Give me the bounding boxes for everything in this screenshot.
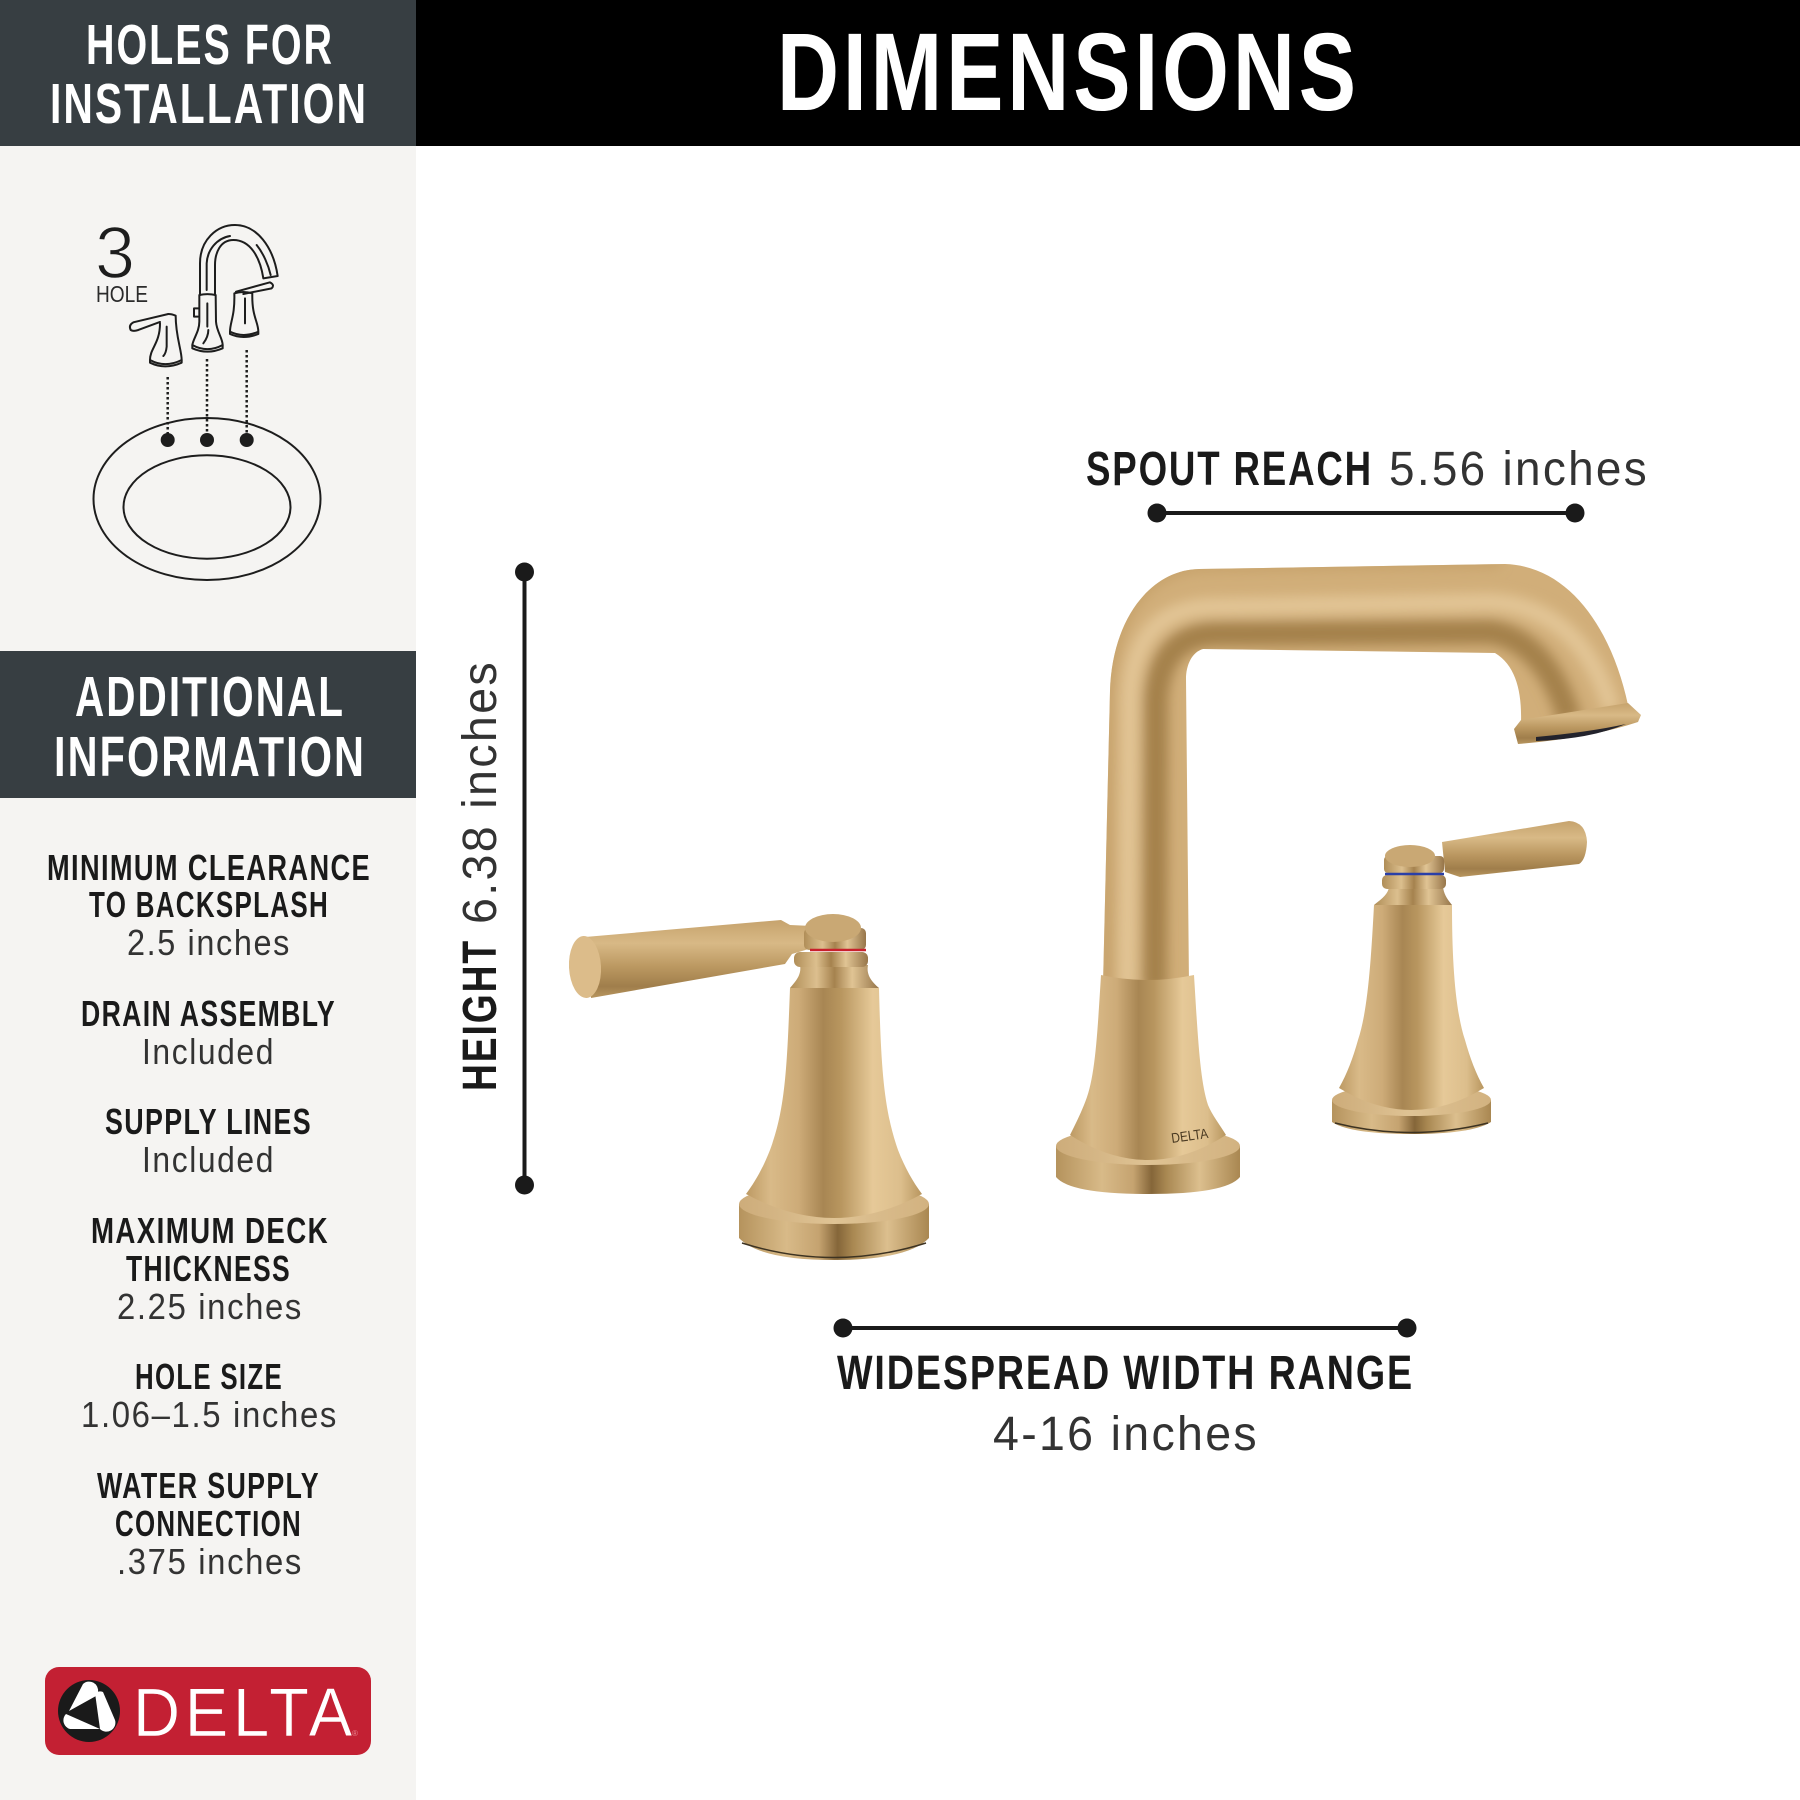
header: holes for installation: INSTALLATION	[50, 72, 368, 136]
spec: minimum clearance to backsplash: MINIMUM CLEARANCE	[47, 847, 371, 888]
header: dimensions title	[416, 0, 1800, 146]
dimension: spout reach: 5.56 inches	[1389, 443, 1649, 496]
icon: three hole faucet and sink diagram: HOLE	[96, 281, 148, 307]
spec: hole size: 1.06–1.5 inches	[81, 1394, 338, 1435]
spec: water supply connection: .375 inches	[117, 1541, 303, 1582]
header: holes for installation	[0, 0, 416, 146]
dimension: spout reach: SPOUT REACH	[1086, 443, 1373, 496]
spec: minimum clearance to backsplash	[47, 847, 371, 963]
spec: water supply connection	[97, 1465, 320, 1582]
spec: supply lines	[105, 1101, 312, 1180]
spec: minimum clearance to backsplash: 2.5 inches	[127, 922, 291, 963]
header: additional information	[0, 651, 416, 798]
header: dimensions title: DIMENSIONS	[777, 11, 1360, 134]
icon: three hole faucet and sink diagram: 3	[95, 213, 135, 294]
faucet: right cold handle	[1332, 821, 1587, 1134]
header: additional information: ADDITIONAL	[75, 665, 345, 729]
spec: water supply connection: WATER SUPPLY	[97, 1465, 320, 1506]
spec: drain assembly: Included	[142, 1031, 275, 1072]
dimension: widespread width range	[834, 1318, 1416, 1461]
dimension: widespread width range: WIDESPREAD WIDTH RANGE	[837, 1347, 1414, 1400]
dimension: height	[454, 562, 534, 1194]
faucet: center spout	[1056, 562, 1641, 1194]
spec: hole size	[81, 1356, 338, 1435]
spec: hole size: HOLE SIZE	[135, 1356, 283, 1397]
header: holes for installation: HOLES FOR	[86, 13, 334, 77]
header: additional information: INFORMATION	[54, 725, 366, 789]
logo: delta: ®	[352, 1729, 358, 1738]
faucet: center spout: DELTA	[1170, 1125, 1210, 1146]
spec: maximum deck thickness: 2.25 inches	[117, 1286, 303, 1327]
logo: delta	[45, 1667, 371, 1755]
spec: water supply connection: CONNECTION	[115, 1503, 302, 1544]
dimension: spout reach	[1086, 443, 1649, 522]
spec: maximum deck thickness: MAXIMUM DECK	[91, 1210, 329, 1251]
spec: drain assembly	[81, 993, 336, 1072]
dimension: widespread width range: 4-16 inches	[993, 1408, 1259, 1461]
spec: maximum deck thickness	[91, 1210, 329, 1327]
dimension: height: 6.38 inches	[454, 660, 507, 924]
panel: left sidebar background	[0, 0, 416, 1800]
dimension: height: HEIGHT	[454, 939, 507, 1091]
spec: drain assembly: DRAIN ASSEMBLY	[81, 993, 336, 1034]
spec: supply lines: Included	[142, 1139, 275, 1180]
faucet: left hot handle	[567, 914, 929, 1260]
spec: minimum clearance to backsplash: TO BACKSPLASH	[89, 884, 329, 925]
spec: supply lines: SUPPLY LINES	[105, 1101, 312, 1142]
logo: delta: DELTA	[133, 1674, 357, 1751]
spec: maximum deck thickness: THICKNESS	[126, 1248, 291, 1289]
icon: three hole faucet and sink diagram	[94, 213, 320, 580]
